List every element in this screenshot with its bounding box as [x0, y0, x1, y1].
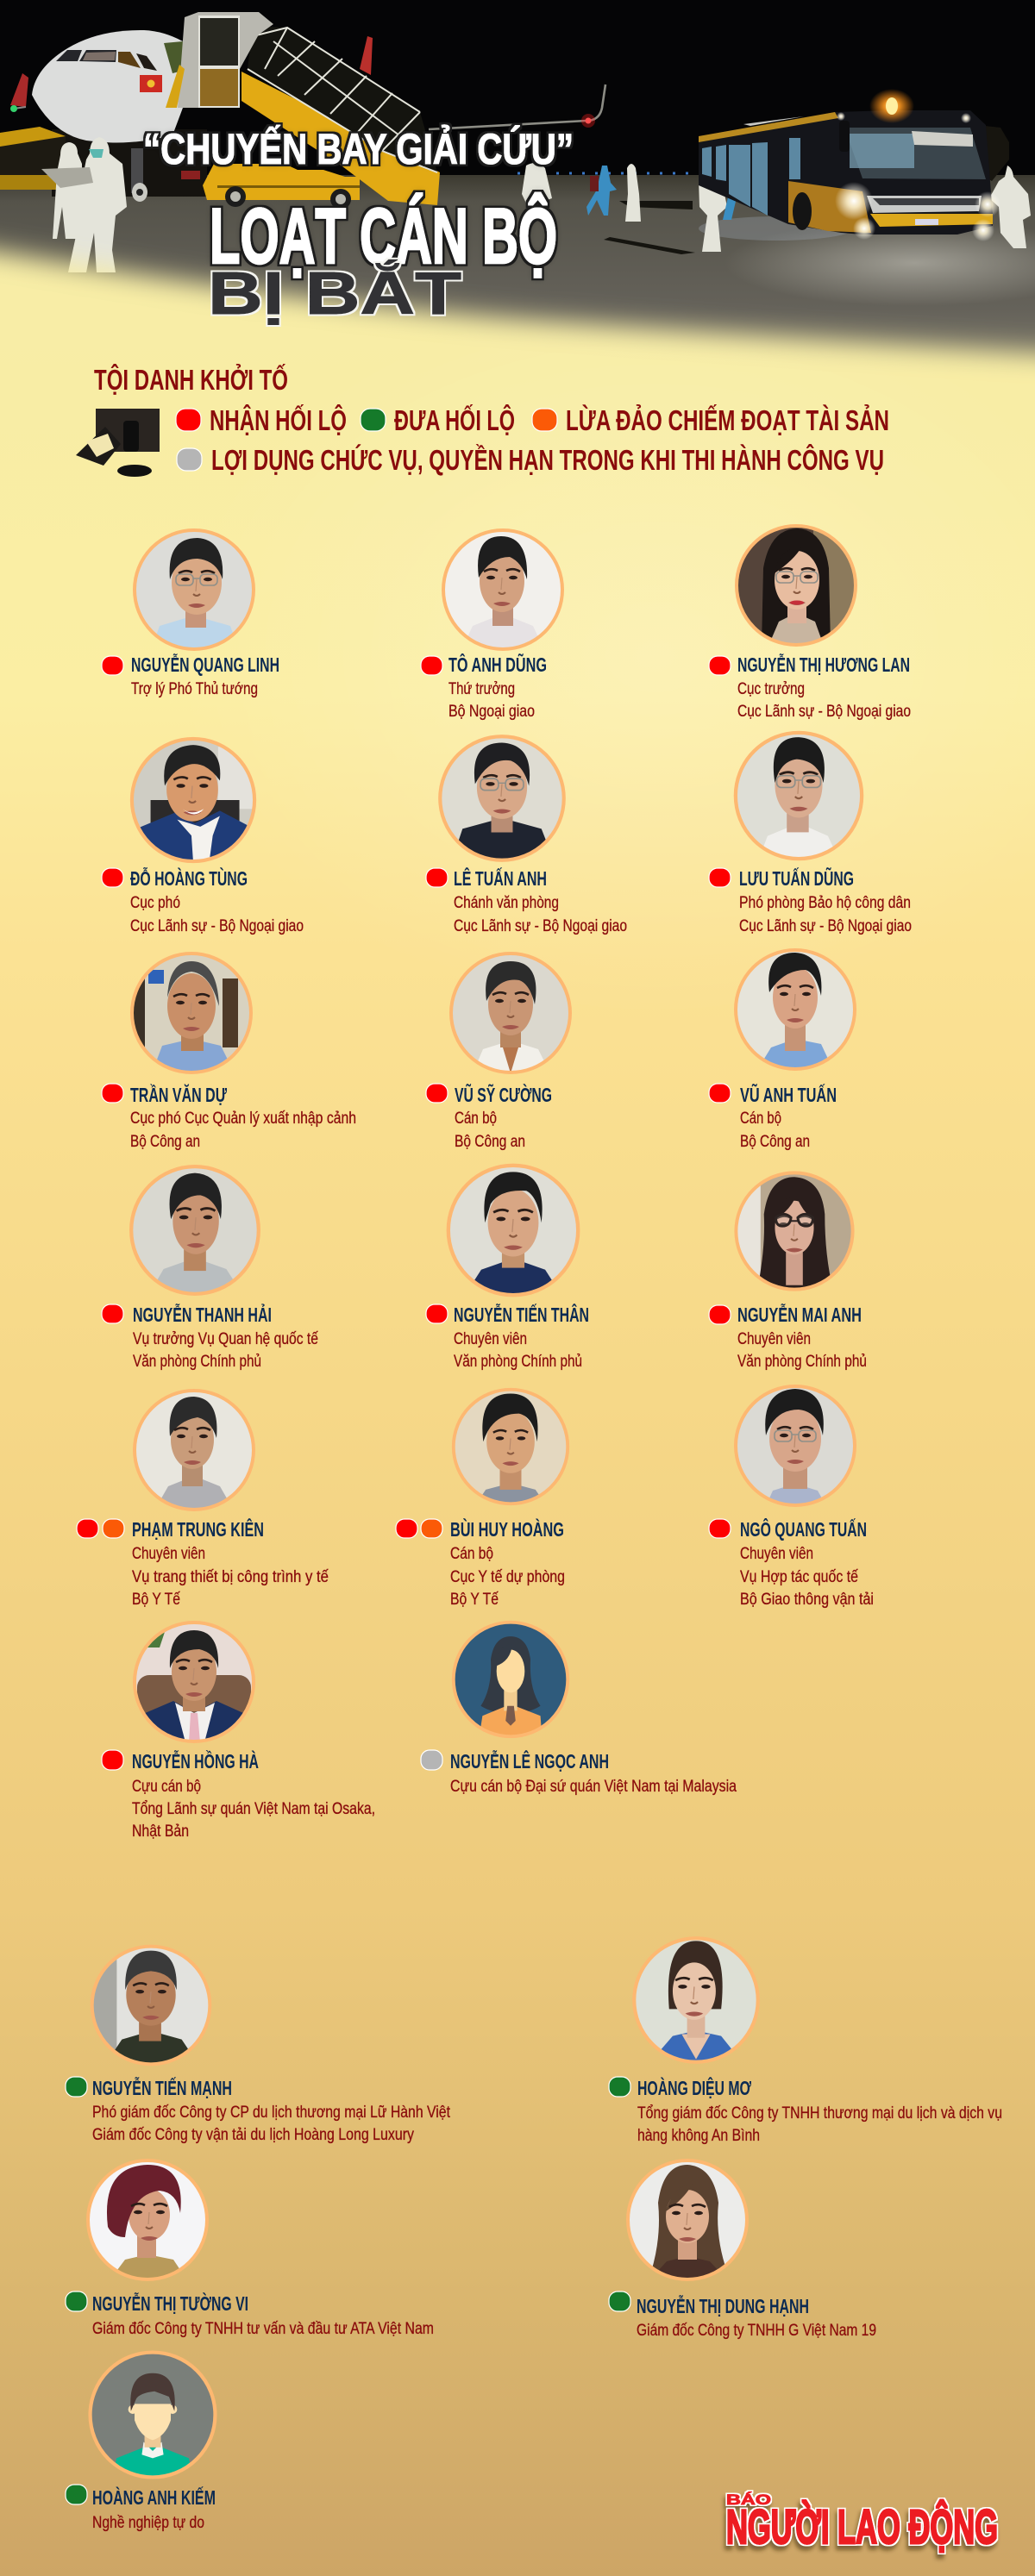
role: Cựu cán bộ Đại sứ quán Việt Nam tại Malaysia	[450, 1777, 737, 1796]
person: Hoàng Diệu Mơ	[609, 1937, 1002, 2145]
role	[637, 2104, 1002, 2145]
icon: gavel	[76, 409, 160, 477]
name: ĐỖ HOÀNG TÙNG	[130, 866, 248, 890]
marker	[102, 1084, 123, 1103]
marker	[709, 1084, 731, 1103]
person: Nguyễn Tiến Mạnh	[66, 1946, 450, 2144]
role: Cục Lãnh sự - Bộ Ngoại giao	[737, 702, 911, 721]
name: NGUYỄN LÊ NGỌC ANH	[450, 1748, 609, 1773]
marker	[426, 1304, 448, 1323]
legend item: bribe giving: ĐƯA HỐI LỘ	[394, 403, 515, 436]
role: Chuyên viên	[737, 1329, 811, 1348]
role: Cục Lãnh sự - Bộ Ngoại giao	[454, 916, 627, 935]
role: Giám đốc Công ty vận tải du lịch Hoàng Long Luxury	[92, 2125, 414, 2144]
marker	[102, 868, 123, 887]
role: Chánh văn phòng	[454, 893, 559, 912]
role: Cán bộ	[450, 1544, 493, 1563]
plane	[0, 30, 207, 202]
role: Cựu cán bộ	[132, 1777, 201, 1796]
role: Bộ Công an	[740, 1132, 810, 1151]
role: Giám đốc Công ty TNHH tư vấn và đầu tư ATA Việt Nam	[92, 2319, 434, 2338]
person: Vũ Anh Tuấn	[709, 949, 856, 1151]
role	[132, 1544, 329, 1609]
person: Nguyễn Thị Hương Lan	[709, 525, 911, 721]
portrait: illustration	[90, 2352, 216, 2478]
role: Bộ Y Tế	[450, 1590, 499, 1609]
legend item: bribe taking	[176, 403, 347, 436]
portrait	[736, 525, 856, 646]
role: Chuyên viên	[740, 1544, 813, 1563]
role: Vụ trưởng Vụ Quan hệ quốc tế	[133, 1329, 318, 1348]
name: HOÀNG ANH KIẾM	[92, 2485, 216, 2509]
role: Cán bộ	[455, 1109, 497, 1128]
person: Trần Văn Dự	[102, 953, 356, 1151]
portrait	[131, 738, 255, 862]
marker	[609, 2292, 630, 2311]
marker	[421, 656, 442, 675]
role: Trợ lý Phó Thủ tướng	[131, 679, 258, 698]
name: PHẠM TRUNG KIÊN	[132, 1517, 264, 1541]
role	[454, 893, 627, 935]
marker	[709, 656, 731, 675]
logo: Báo Người Lao Động: BÁO	[726, 2492, 771, 2508]
role: Phó phòng Bảo hộ công dân	[739, 893, 911, 912]
role	[740, 1544, 874, 1609]
role: Vụ trang thiết bị công trình y tế	[132, 1567, 329, 1586]
name: NGUYỄN THỊ DUNG HẠNH	[637, 2293, 809, 2317]
role	[740, 1109, 810, 1151]
person: Lê Tuấn Anh	[426, 735, 627, 935]
role: Bộ Giao thông vận tải	[740, 1590, 874, 1609]
portrait	[442, 529, 563, 650]
person: Nguyễn Quang Linh	[102, 529, 279, 698]
portrait	[134, 1390, 254, 1510]
role: Cán bộ	[740, 1109, 781, 1128]
role: Cục phó Cục Quản lý xuất nhập cảnh	[130, 1109, 356, 1128]
role: Chuyên viên	[132, 1544, 205, 1563]
name: TÔ ANH DŨNG	[448, 653, 547, 676]
marker	[102, 656, 123, 675]
portrait	[91, 1946, 210, 2065]
role: Văn phòng Chính phủ	[454, 1352, 582, 1371]
legend item: bribe giving	[361, 403, 515, 436]
person: Bùi Huy Hoàng	[396, 1389, 568, 1609]
legend heading: TỘI DANH KHỞI TỐ	[94, 363, 288, 396]
role: Nghề nghiệp tự do	[92, 2513, 204, 2532]
workers	[53, 137, 1031, 272]
person: Nguyễn Thị Dung Hạnh	[609, 2160, 876, 2340]
role: Phó giám đốc Công ty CP du lịch thương mại Lữ Hành Việt	[92, 2103, 450, 2122]
role	[737, 679, 911, 721]
markers	[77, 1519, 124, 1538]
portrait	[633, 1937, 759, 2063]
role	[455, 1109, 525, 1151]
marker	[66, 2485, 87, 2504]
role: Văn phòng Chính phủ	[737, 1352, 867, 1371]
name: NGUYỄN THỊ TƯỜNG VI	[92, 2291, 248, 2315]
legend: charges	[76, 363, 889, 477]
portrait	[735, 949, 856, 1070]
role: Cục Lãnh sự - Bộ Ngoại giao	[739, 916, 912, 935]
person: Lưu Tuấn Dũng	[709, 732, 912, 935]
marker	[66, 2077, 87, 2097]
person: Nguyễn Lê Ngọc Anh	[421, 1622, 737, 1796]
role	[132, 1777, 375, 1841]
role: Giám đốc Công ty TNHH G Việt Nam 19	[637, 2321, 876, 2340]
stair truck	[166, 12, 440, 209]
name: VŨ ANH TUẤN	[740, 1083, 837, 1106]
role: Cục trưởng	[737, 679, 805, 698]
person: Đỗ Hoàng Tùng	[102, 738, 304, 935]
role: Bộ Công an	[130, 1132, 200, 1151]
legend item: fraud: LỪA ĐẢO CHIẾM ĐOẠT TÀI SẢN	[566, 404, 889, 436]
marker	[609, 2077, 630, 2097]
person: Nguyễn Mai Anh	[709, 1172, 867, 1371]
role: Cục Y tế dự phòng	[450, 1567, 565, 1586]
portrait	[735, 732, 862, 860]
role: Vụ Hợp tác quốc tế	[740, 1567, 858, 1586]
role	[130, 1109, 356, 1151]
role	[92, 2103, 450, 2144]
marker	[709, 1519, 731, 1538]
wing	[429, 84, 605, 129]
person: Ngô Quang Tuấn	[709, 1385, 874, 1609]
portrait	[131, 953, 252, 1073]
legend item: fraud	[532, 404, 889, 436]
title line 3: BỊ BẮT	[208, 259, 461, 327]
name: VŨ SỸ CƯỜNG	[455, 1083, 552, 1106]
header photo: airport scene	[0, 0, 1035, 399]
distant lights	[518, 172, 699, 174]
portrait	[735, 1385, 856, 1506]
portrait	[735, 1172, 854, 1291]
person: Nguyễn Thị Tường Vi	[66, 2160, 434, 2338]
marker	[426, 868, 448, 887]
role: Bộ Y Tế	[132, 1590, 180, 1609]
marker	[66, 2292, 87, 2311]
role: Bộ Công an	[455, 1132, 525, 1151]
ground shadows	[604, 201, 695, 254]
marker	[102, 1304, 123, 1323]
role: Thứ trưởng	[448, 679, 515, 698]
title	[143, 125, 574, 327]
role: Nhật Bản	[132, 1822, 189, 1841]
role	[450, 1544, 565, 1609]
marker	[102, 1750, 123, 1770]
person: Vũ Sỹ Cường	[426, 953, 571, 1151]
portrait	[450, 953, 571, 1073]
portrait: illustration	[453, 1622, 568, 1737]
portrait	[439, 735, 565, 861]
marker	[426, 1084, 448, 1103]
person: Nguyễn Thanh Hải	[102, 1166, 318, 1371]
portrait	[87, 2160, 208, 2280]
role: Chuyên viên	[454, 1329, 527, 1348]
portrait	[130, 1166, 260, 1295]
person: Nguyễn Tiến Thân	[426, 1165, 589, 1371]
name: NGÔ QUANG TUẤN	[740, 1517, 867, 1541]
role: Bộ Ngoại giao	[448, 702, 535, 721]
name: NGUYỄN MAI ANH	[737, 1302, 862, 1326]
name: TRẦN VĂN DỰ	[130, 1083, 228, 1106]
person: Nguyễn Hồng Hà	[102, 1622, 375, 1841]
role: Văn phòng Chính phủ	[133, 1352, 261, 1371]
name: NGUYỄN HỒNG HÀ	[132, 1748, 259, 1773]
portrait	[627, 2160, 748, 2280]
name: LƯU TUẤN DŨNG	[739, 866, 854, 890]
person: Tô Anh Dũng	[421, 529, 563, 721]
name: LÊ TUẤN ANH	[454, 866, 547, 890]
role	[454, 1329, 582, 1371]
portrait	[134, 529, 254, 650]
name: NGUYỄN QUANG LINH	[131, 652, 279, 676]
name: BÙI HUY HOÀNG	[450, 1517, 564, 1541]
role	[737, 1329, 867, 1371]
name: NGUYỄN TIẾN THÂN	[454, 1302, 589, 1326]
marker	[421, 1750, 442, 1770]
role	[448, 679, 535, 721]
role	[739, 893, 912, 935]
title line 2: LOẠT CÁN BỘ	[210, 192, 557, 280]
portrait	[453, 1389, 568, 1504]
role: hàng không An Bình	[637, 2126, 760, 2145]
role: Tổng Lãnh sự quán Việt Nam tại Osaka,	[132, 1799, 375, 1818]
role: Cục Lãnh sự - Bộ Ngoại giao	[130, 916, 304, 935]
name: HOÀNG DIỆU MƠ	[637, 2076, 751, 2099]
name: NGUYỄN THANH HẢI	[133, 1302, 272, 1326]
markers	[396, 1519, 442, 1538]
person: Phạm Trung Kiên	[77, 1390, 329, 1609]
portrait	[134, 1622, 254, 1742]
marker	[709, 1305, 731, 1324]
name: NGUYỄN TIẾN MẠNH	[92, 2075, 232, 2099]
role	[130, 893, 304, 935]
title line 1: “CHUYẾN BAY GIẢI CỨU”	[143, 125, 574, 173]
portrait	[448, 1165, 579, 1296]
name: NGUYỄN THỊ HƯƠNG LAN	[737, 652, 910, 676]
role: Cục phó	[130, 893, 180, 912]
marker	[709, 868, 731, 887]
person: Hoàng Anh Kiếm	[66, 2352, 216, 2532]
role	[133, 1329, 318, 1371]
bus	[699, 89, 1009, 241]
legend item: bribe taking: NHẬN HỐI LỘ	[210, 403, 347, 436]
